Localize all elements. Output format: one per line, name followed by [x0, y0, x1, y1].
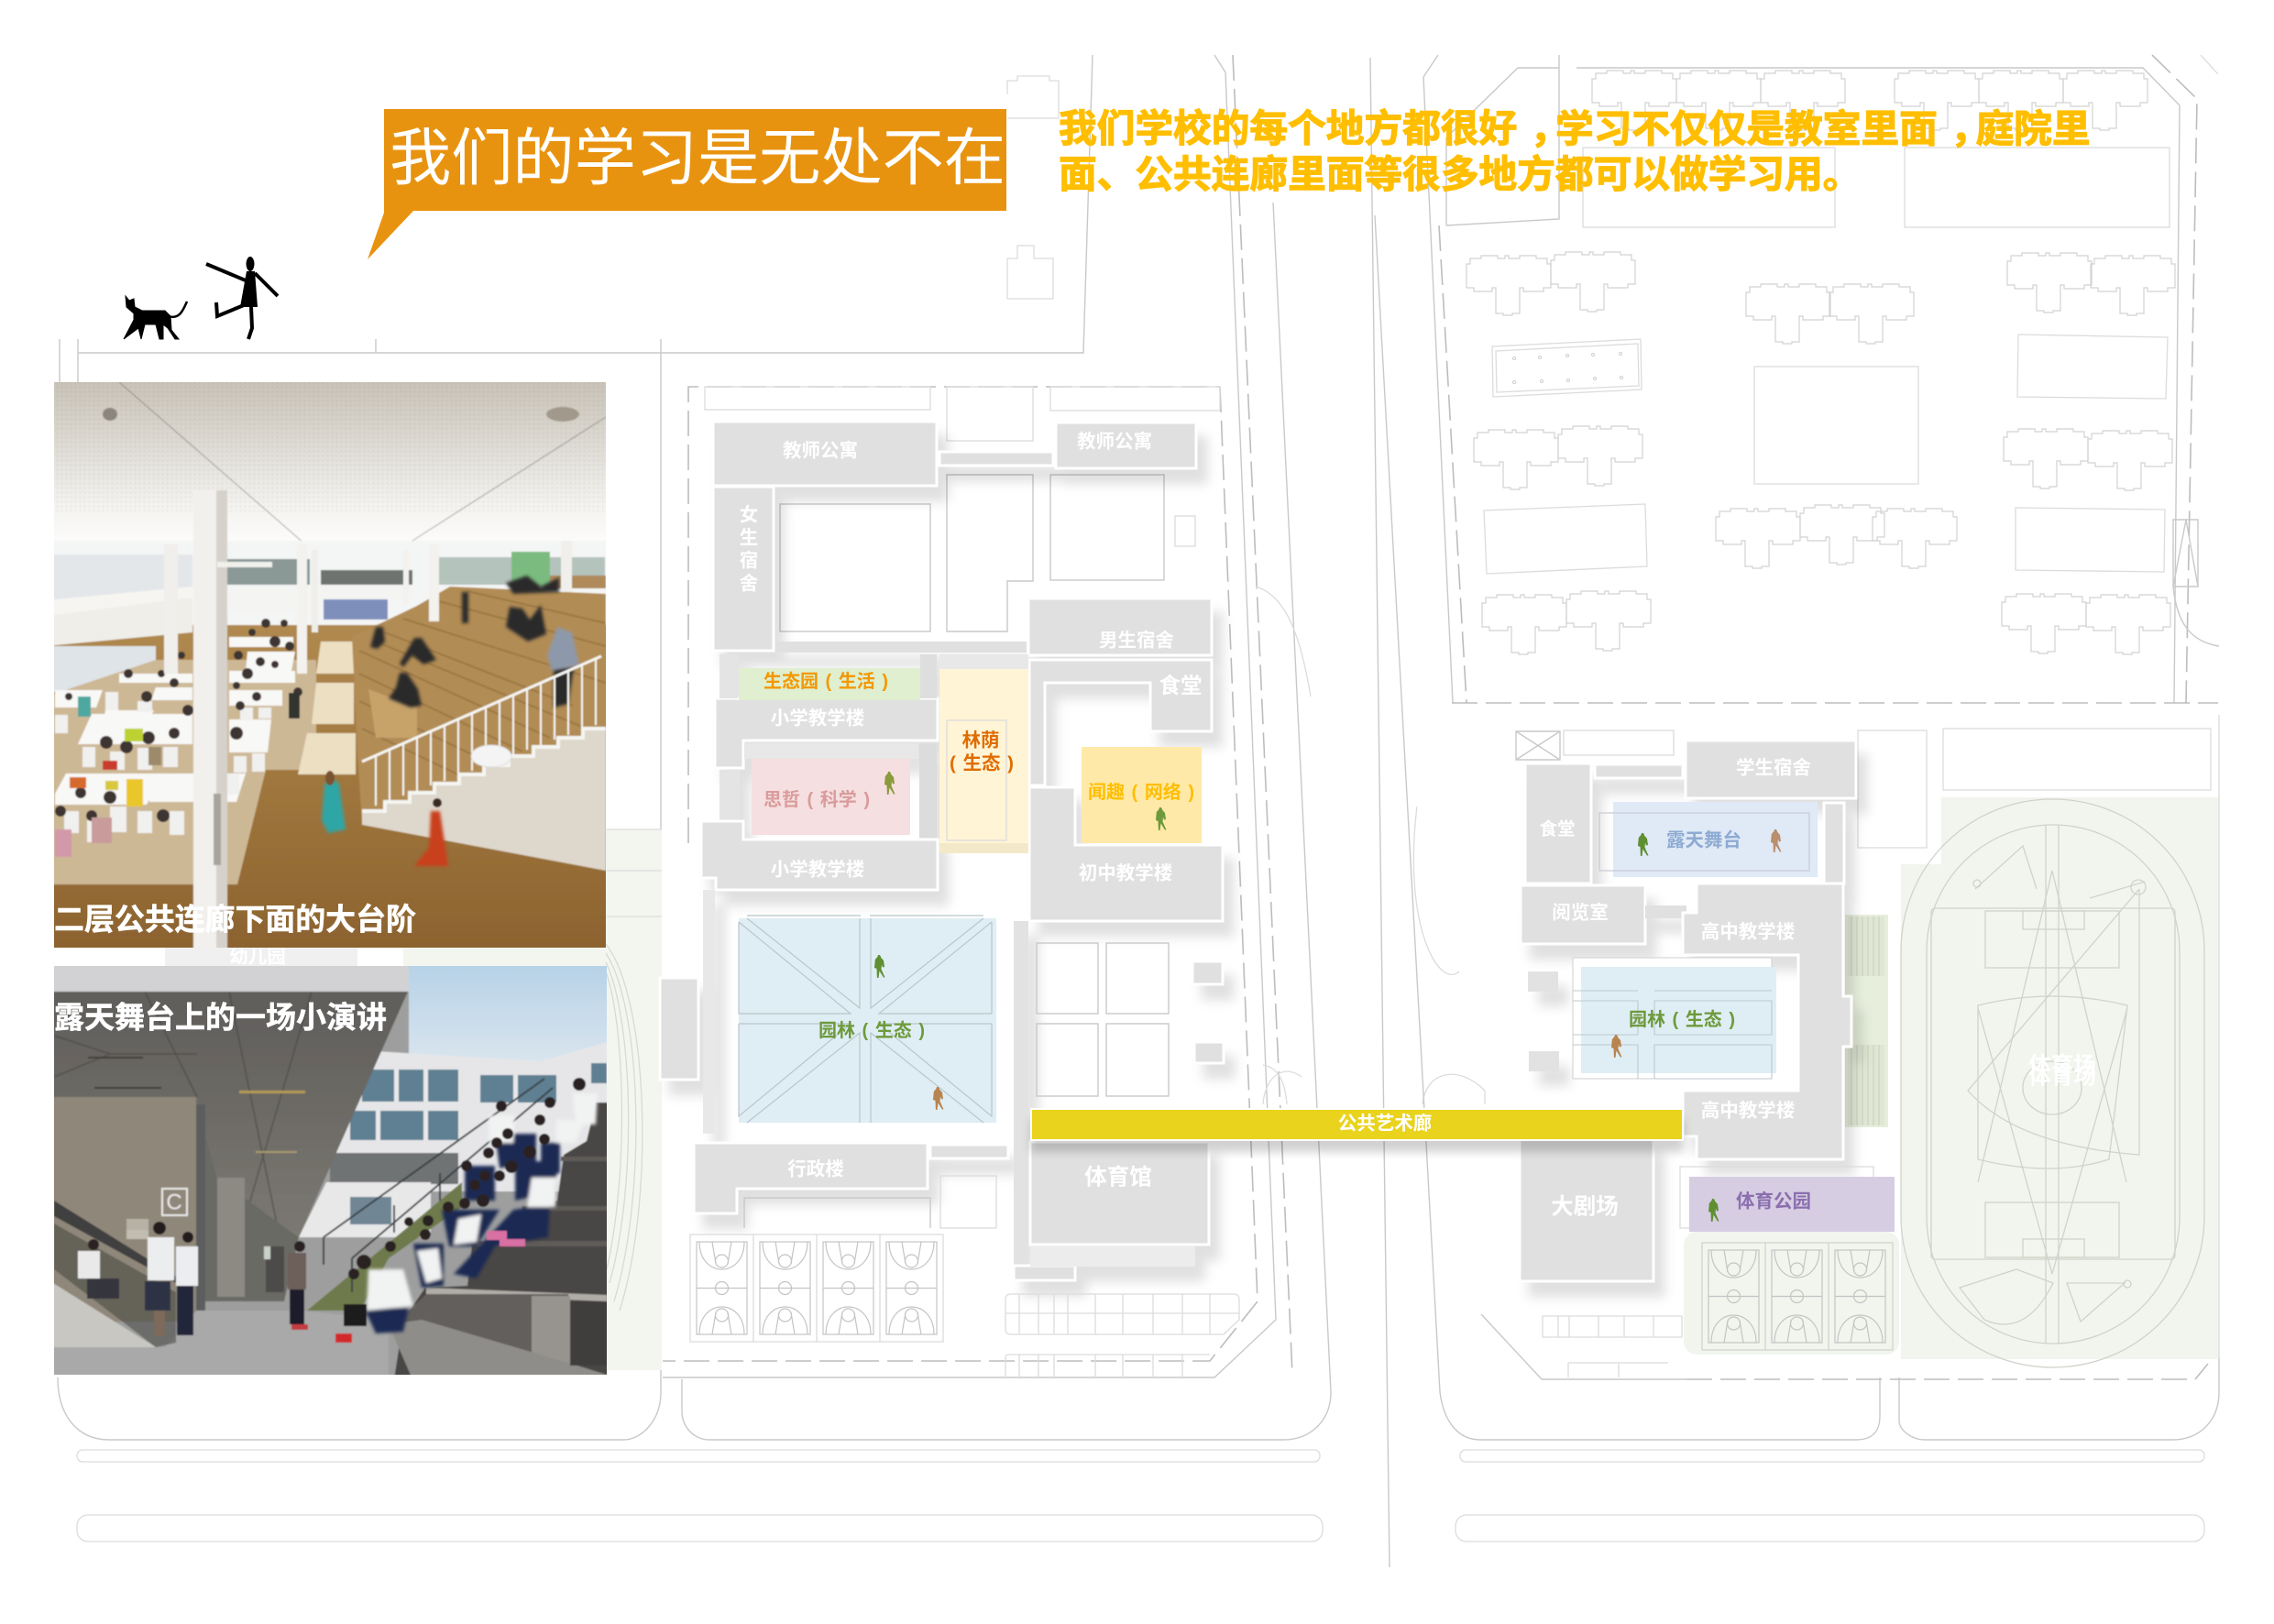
west campus buildings [660, 422, 1224, 1281]
description text: 面、公共连廊里面等很多地方都可以做学习用。 [1059, 152, 1861, 196]
red dress figure [414, 798, 448, 866]
icon: person in interest courtyard [1156, 807, 1166, 830]
panel: open-air stage: 露天舞台 [1666, 828, 1741, 850]
ceiling [54, 382, 606, 542]
public art gallery bar: 公共艺术廊 [1338, 1113, 1432, 1135]
panel: open-air stage [1599, 802, 1818, 877]
description text [1059, 106, 2091, 196]
east building labels: 大剧场 [1551, 1193, 1619, 1219]
east building labels [1539, 757, 1811, 1219]
photo: open-air stage talk: C [166, 1190, 182, 1215]
west campus building labels: 舍 [740, 572, 759, 594]
photo: open-air stage talk [46, 958, 614, 1379]
east campus small outlines [1516, 715, 2219, 1359]
west campus building labels: 小学教学楼 [771, 858, 865, 880]
east campus buildings [1520, 741, 1856, 1281]
west parking [1005, 1294, 1239, 1377]
photo: public gallery grand stairs [46, 376, 614, 953]
icon: running person silhouette [206, 257, 278, 339]
icon: person green on stage [1638, 833, 1648, 856]
overhang top [46, 958, 409, 992]
panel: interest courtyard: 闻趣 ( 网络 ) [1088, 781, 1194, 803]
underside [46, 992, 408, 1237]
caption: grand stairs: 二层公共连廊下面的大台阶 [54, 902, 416, 937]
west campus building labels: 宿 [740, 550, 758, 572]
panel: interest courtyard [1082, 747, 1202, 843]
panel: shaded walk: 林荫 [962, 730, 999, 752]
white building [335, 1040, 614, 1191]
west campus building labels: 小学教学楼 [771, 708, 865, 730]
lamp arms [217, 562, 272, 567]
panel: science courtyard: 思哲 ( 科学 ) [763, 789, 870, 810]
ground [46, 1311, 389, 1379]
panel: east garden [1573, 958, 1776, 1079]
label: sports field (doubled in original): 体育场 [2028, 1052, 2096, 1078]
label: kindergarten: 幼儿园 [229, 946, 286, 968]
west campus building labels: 初中教学楼 [1079, 861, 1173, 883]
label: sports field (doubled in original): 体育场 [2028, 1063, 2096, 1089]
panel: east garden: 园林 ( 生态 ) [1629, 1008, 1735, 1030]
diners [55, 619, 302, 822]
teacher [288, 1241, 308, 1330]
west campus building labels [740, 431, 1203, 1190]
title banner speech bubble: 我们的学习是无处不在 [390, 124, 1005, 193]
caption: open-air stage: 露天舞台上的一场小演讲 [54, 1001, 387, 1034]
west campus building labels: 教师公寓 [783, 440, 858, 462]
panel: ecological garden: 生态园 ( 生活 ) [763, 670, 888, 692]
sports ground base [1684, 797, 2219, 1359]
west campus site outline and courtyards [688, 387, 1220, 843]
panel: shaded walk [939, 669, 1028, 853]
west campus building labels: 生 [740, 528, 758, 548]
panel: ecological garden [739, 668, 920, 700]
site plan linework: residential quarter [1423, 55, 2219, 703]
east building labels: 高中教学楼 [1701, 920, 1796, 942]
far hall [46, 541, 614, 625]
dark steps [394, 1103, 614, 1379]
east basketball courts [1702, 1243, 1893, 1350]
icon: person brown in east garden [1611, 1035, 1622, 1058]
grass slope [307, 1182, 462, 1311]
icon: person brown in garden [933, 1087, 944, 1110]
left stair [46, 1278, 156, 1347]
concrete wall [46, 1097, 196, 1322]
label: sports field (doubled in original) [2028, 1052, 2096, 1089]
teal dress figure [322, 771, 346, 833]
icon: cat silhouette [124, 296, 187, 339]
sports ground: running track and football field [1901, 799, 2204, 1367]
west basketball courts [690, 1234, 943, 1342]
west campus building labels: 体育馆 [1084, 1164, 1152, 1190]
kindergarten field behind photos [165, 829, 662, 1370]
railing [362, 656, 601, 806]
chairs [55, 692, 271, 842]
east parking and road edge [1481, 1314, 2208, 1379]
columns [164, 544, 178, 674]
west campus building labels: 行政楼 [787, 1158, 844, 1180]
panel: shaded walk: ( 生态 ) [950, 752, 1014, 774]
west campus building labels: 教师公寓 [1077, 431, 1152, 453]
passage and columns [196, 1097, 299, 1301]
west campus building labels: 食堂 [1159, 673, 1203, 697]
panel: sports park [1680, 1167, 1895, 1232]
panel: west garden: 园林 ( 生态 ) [818, 1019, 925, 1041]
description text: 我们学校的每个地方都很好 ，学习不仅仅是教室里面 ，庭院里 [1059, 106, 2091, 150]
icon: person brown on stage [1771, 829, 1782, 852]
west campus building labels: 女 [740, 504, 758, 526]
panel: west garden [739, 916, 996, 1123]
title banner speech bubble [368, 109, 1006, 259]
east building labels: 食堂 [1539, 818, 1576, 839]
east building labels: 阅览室 [1552, 902, 1609, 924]
icon: person green in garden [874, 955, 885, 978]
stair wall [362, 729, 606, 871]
icon: person in science courtyard [884, 772, 895, 795]
people on stairs [370, 576, 574, 708]
cafeteria floor [46, 660, 316, 884]
cafeteria tables [55, 637, 295, 805]
grand stairs [352, 587, 606, 825]
students [364, 1093, 598, 1333]
west campus building labels: 男生宿舍 [1099, 629, 1174, 651]
students at left stairs [78, 1222, 198, 1336]
east building labels: 高中教学楼 [1701, 1100, 1796, 1122]
public art gallery bar [1031, 1109, 1683, 1140]
sun patches [298, 642, 356, 774]
icon: person in sports park [1708, 1199, 1719, 1222]
panel: sports park: 体育公园 [1736, 1190, 1811, 1212]
panel: science courtyard [752, 759, 910, 835]
west campus white courts [744, 943, 1169, 1228]
east building labels: 学生宿舍 [1736, 757, 1811, 779]
